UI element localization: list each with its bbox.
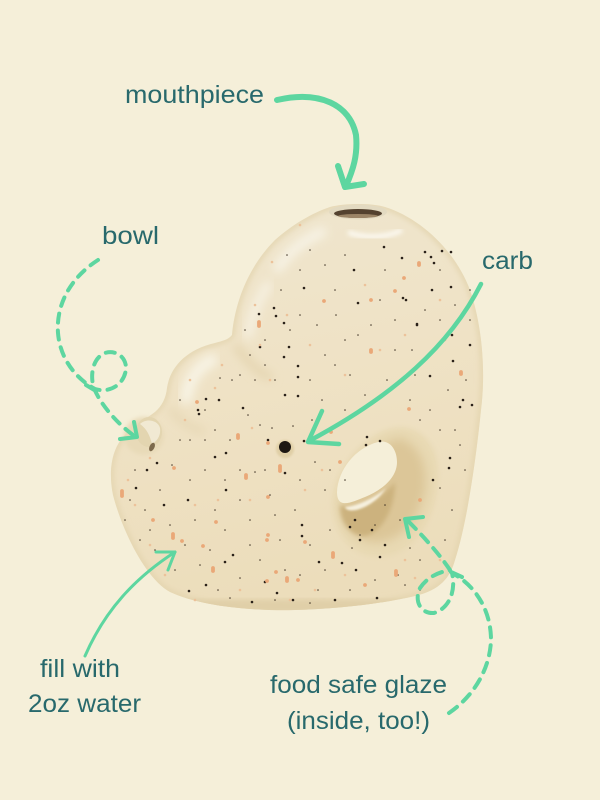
label: fill with 2oz water (28, 655, 141, 718)
arrow: carb (308, 284, 481, 444)
hole opening (337, 442, 397, 503)
bowl opening (124, 417, 164, 455)
label: food safe glaze: (inside, too!) (287, 707, 430, 735)
ceramic heart pipe (111, 204, 483, 613)
pipe body (111, 204, 483, 610)
arrow: fill (85, 552, 175, 656)
dashed arrow: bowl (58, 260, 137, 439)
label: food safe glaze: food safe glaze (270, 671, 447, 699)
label: food safe glaze (270, 671, 447, 735)
arrow: mouthpiece (277, 97, 364, 187)
label: fill with 2oz water: fill with (40, 655, 120, 683)
label: carb: carb (482, 247, 533, 275)
label: fill with 2oz water: 2oz water (28, 690, 141, 718)
label: mouthpiece: mouthpiece (125, 81, 264, 109)
infographic canvas (29, 85, 532, 734)
glaze shading (111, 204, 483, 613)
ring hole (332, 428, 438, 557)
label: bowl: bowl (102, 222, 159, 250)
orange speckles (122, 263, 461, 585)
mouthpiece opening (329, 204, 387, 220)
black speckles (136, 247, 472, 602)
carb hole (276, 440, 294, 458)
dashed arrow: glaze (405, 517, 491, 713)
